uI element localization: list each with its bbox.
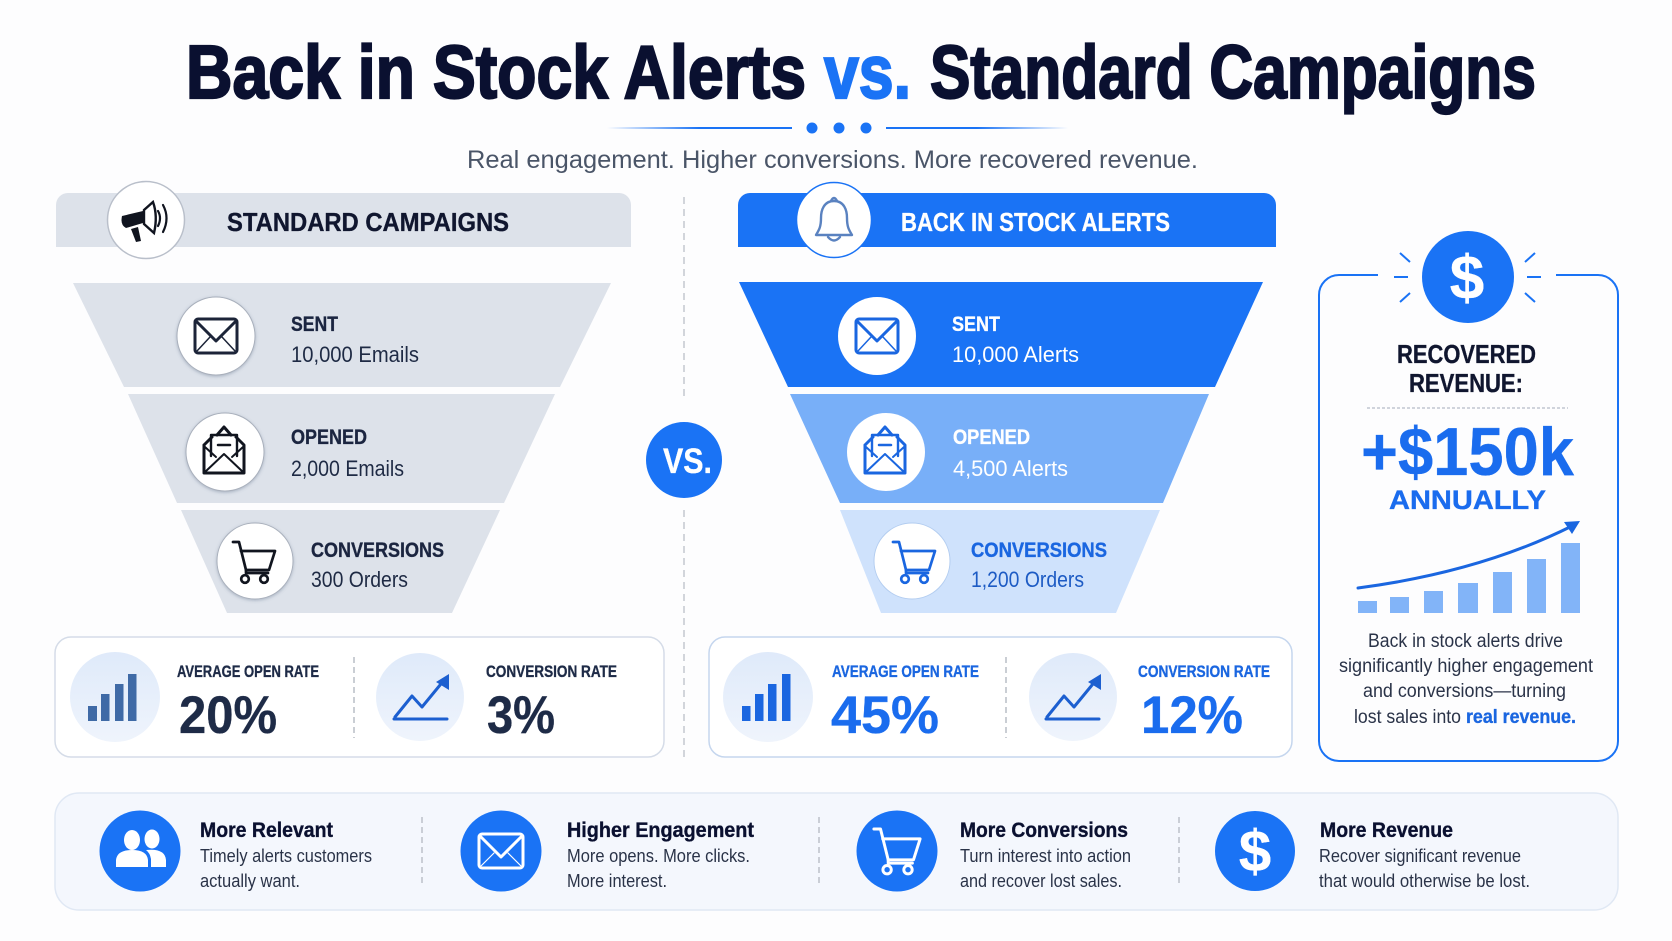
benefit: more conversions: Turn interest into action [960, 846, 1131, 866]
benefit: more relevant: actually want. [200, 871, 300, 891]
funnel stage: opened: OPENED [291, 426, 367, 449]
stats card: standard campaigns [55, 637, 664, 757]
big number: +$150k annually: ANNUALLY [1389, 485, 1546, 515]
icon: bar chart [70, 652, 160, 742]
funnel stage: conversions: 1,200 Orders [971, 567, 1084, 592]
benefit: more revenue: More Revenue [1320, 819, 1453, 842]
funnel stage: opened [790, 394, 1209, 503]
title [186, 30, 1536, 114]
benefit: more conversions: More Conversions [960, 819, 1128, 842]
funnel stage: sent: 10,000 Alerts [952, 342, 1079, 367]
title divider with dots [607, 122, 1068, 134]
funnel stage: conversions: CONVERSIONS [311, 539, 444, 562]
funnel stage: conversions [840, 510, 1160, 613]
metric: conversion rate: 3% [487, 686, 555, 745]
header: standard campaigns [56, 193, 631, 247]
benefit: higher engagement [460, 810, 754, 892]
benefit: more conversions [856, 810, 1131, 892]
metric: conversion rate [1138, 662, 1270, 745]
description text [1339, 631, 1594, 728]
benefit: higher engagement: Higher Engagement [567, 819, 754, 842]
chart: growth bars with arrow [1358, 521, 1580, 613]
funnel stage: sent [739, 282, 1263, 387]
heading: recovered revenue [1397, 339, 1536, 398]
icon: dollar coin with rays [1394, 231, 1541, 323]
funnel stage: sent: SENT [952, 313, 1000, 336]
metric: average open rate: 20% [179, 686, 277, 745]
title: Back in Stock Alerts [186, 30, 806, 114]
metric: conversion rate [486, 662, 617, 745]
funnel stage: opened [128, 394, 555, 503]
funnel stage: opened: OPENED [953, 426, 1030, 449]
benefit: more revenue: $ [1239, 819, 1271, 884]
funnel stage: sent: SENT [291, 313, 338, 336]
funnel stage: opened: 4,500 Alerts [953, 456, 1068, 481]
big number: +$150k annually: +$150k [1361, 414, 1574, 490]
benefit: more relevant [100, 810, 372, 892]
icon: trend arrow [1029, 653, 1117, 741]
panel: benefits bar [55, 793, 1618, 910]
panel: recovered revenue [1319, 231, 1618, 761]
description text: Back in stock alerts drive [1368, 631, 1563, 652]
stats card: back in stock alerts [709, 637, 1292, 757]
funnel stage: opened: 2,000 Emails [291, 456, 404, 481]
funnel stage: sent [73, 283, 611, 387]
benefit: more conversions: and recover lost sales. [960, 871, 1122, 891]
subtitle: Real engagement. Higher conversions. More recovered revenue. [467, 146, 1198, 174]
description text: and conversions—turning [1363, 681, 1566, 702]
metric: conversion rate: CONVERSION RATE [486, 662, 617, 681]
icon: bell [796, 182, 872, 258]
metric: average open rate: AVERAGE OPEN RATE [832, 662, 979, 681]
benefit: more relevant: More Relevant [200, 819, 333, 842]
header: standard campaigns: STANDARD CAMPAIGNS [227, 207, 509, 237]
metric: average open rate: AVERAGE OPEN RATE [177, 662, 319, 681]
panel: standard campaigns [55, 182, 664, 757]
funnel stage: sent: 10,000 Emails [291, 342, 419, 367]
benefit: more relevant: Timely alerts customers [200, 846, 372, 866]
benefit: more revenue [1215, 811, 1530, 891]
title: vs. [824, 30, 911, 114]
funnel stage: conversions [181, 510, 500, 613]
benefit: higher engagement: More opens. More clicks. [567, 846, 750, 866]
description text: lost sales into [1354, 707, 1461, 728]
funnel stage: conversions: CONVERSIONS [971, 539, 1107, 562]
header: back in stock alerts [738, 193, 1276, 247]
heading: recovered revenue: REVENUE: [1409, 368, 1523, 398]
benefit: more revenue: Recover significant revenue [1319, 846, 1521, 866]
center dashed divider [683, 197, 685, 757]
icon: bar chart [723, 652, 813, 742]
icon: trend arrow [376, 653, 464, 741]
vs badge [646, 422, 722, 498]
metric: conversion rate: CONVERSION RATE [1138, 662, 1270, 681]
metric: average open rate [177, 662, 319, 745]
benefit: more revenue: that would otherwise be lost. [1319, 871, 1530, 891]
metric: average open rate: 45% [831, 686, 939, 745]
icon: megaphone [108, 182, 184, 258]
description text: significantly higher engagement [1339, 656, 1594, 677]
description text: real revenue. [1466, 707, 1576, 728]
metric: conversion rate: 12% [1141, 686, 1243, 745]
vs badge: VS. [663, 442, 712, 481]
metric: average open rate [831, 662, 979, 745]
benefit: higher engagement: More interest. [567, 871, 667, 891]
funnel: standard campaigns [73, 283, 611, 613]
funnel stage: conversions: 300 Orders [311, 567, 408, 592]
header: back in stock alerts: BACK IN STOCK ALERTS [901, 207, 1170, 237]
icon: dollar coin with rays: $ [1450, 244, 1484, 313]
heading: recovered revenue: RECOVERED [1397, 339, 1536, 369]
card outline [1319, 275, 1618, 761]
funnel: back in stock alerts [739, 282, 1263, 613]
panel: back in stock alerts [709, 182, 1292, 757]
title: Standard Campaigns [930, 30, 1536, 114]
